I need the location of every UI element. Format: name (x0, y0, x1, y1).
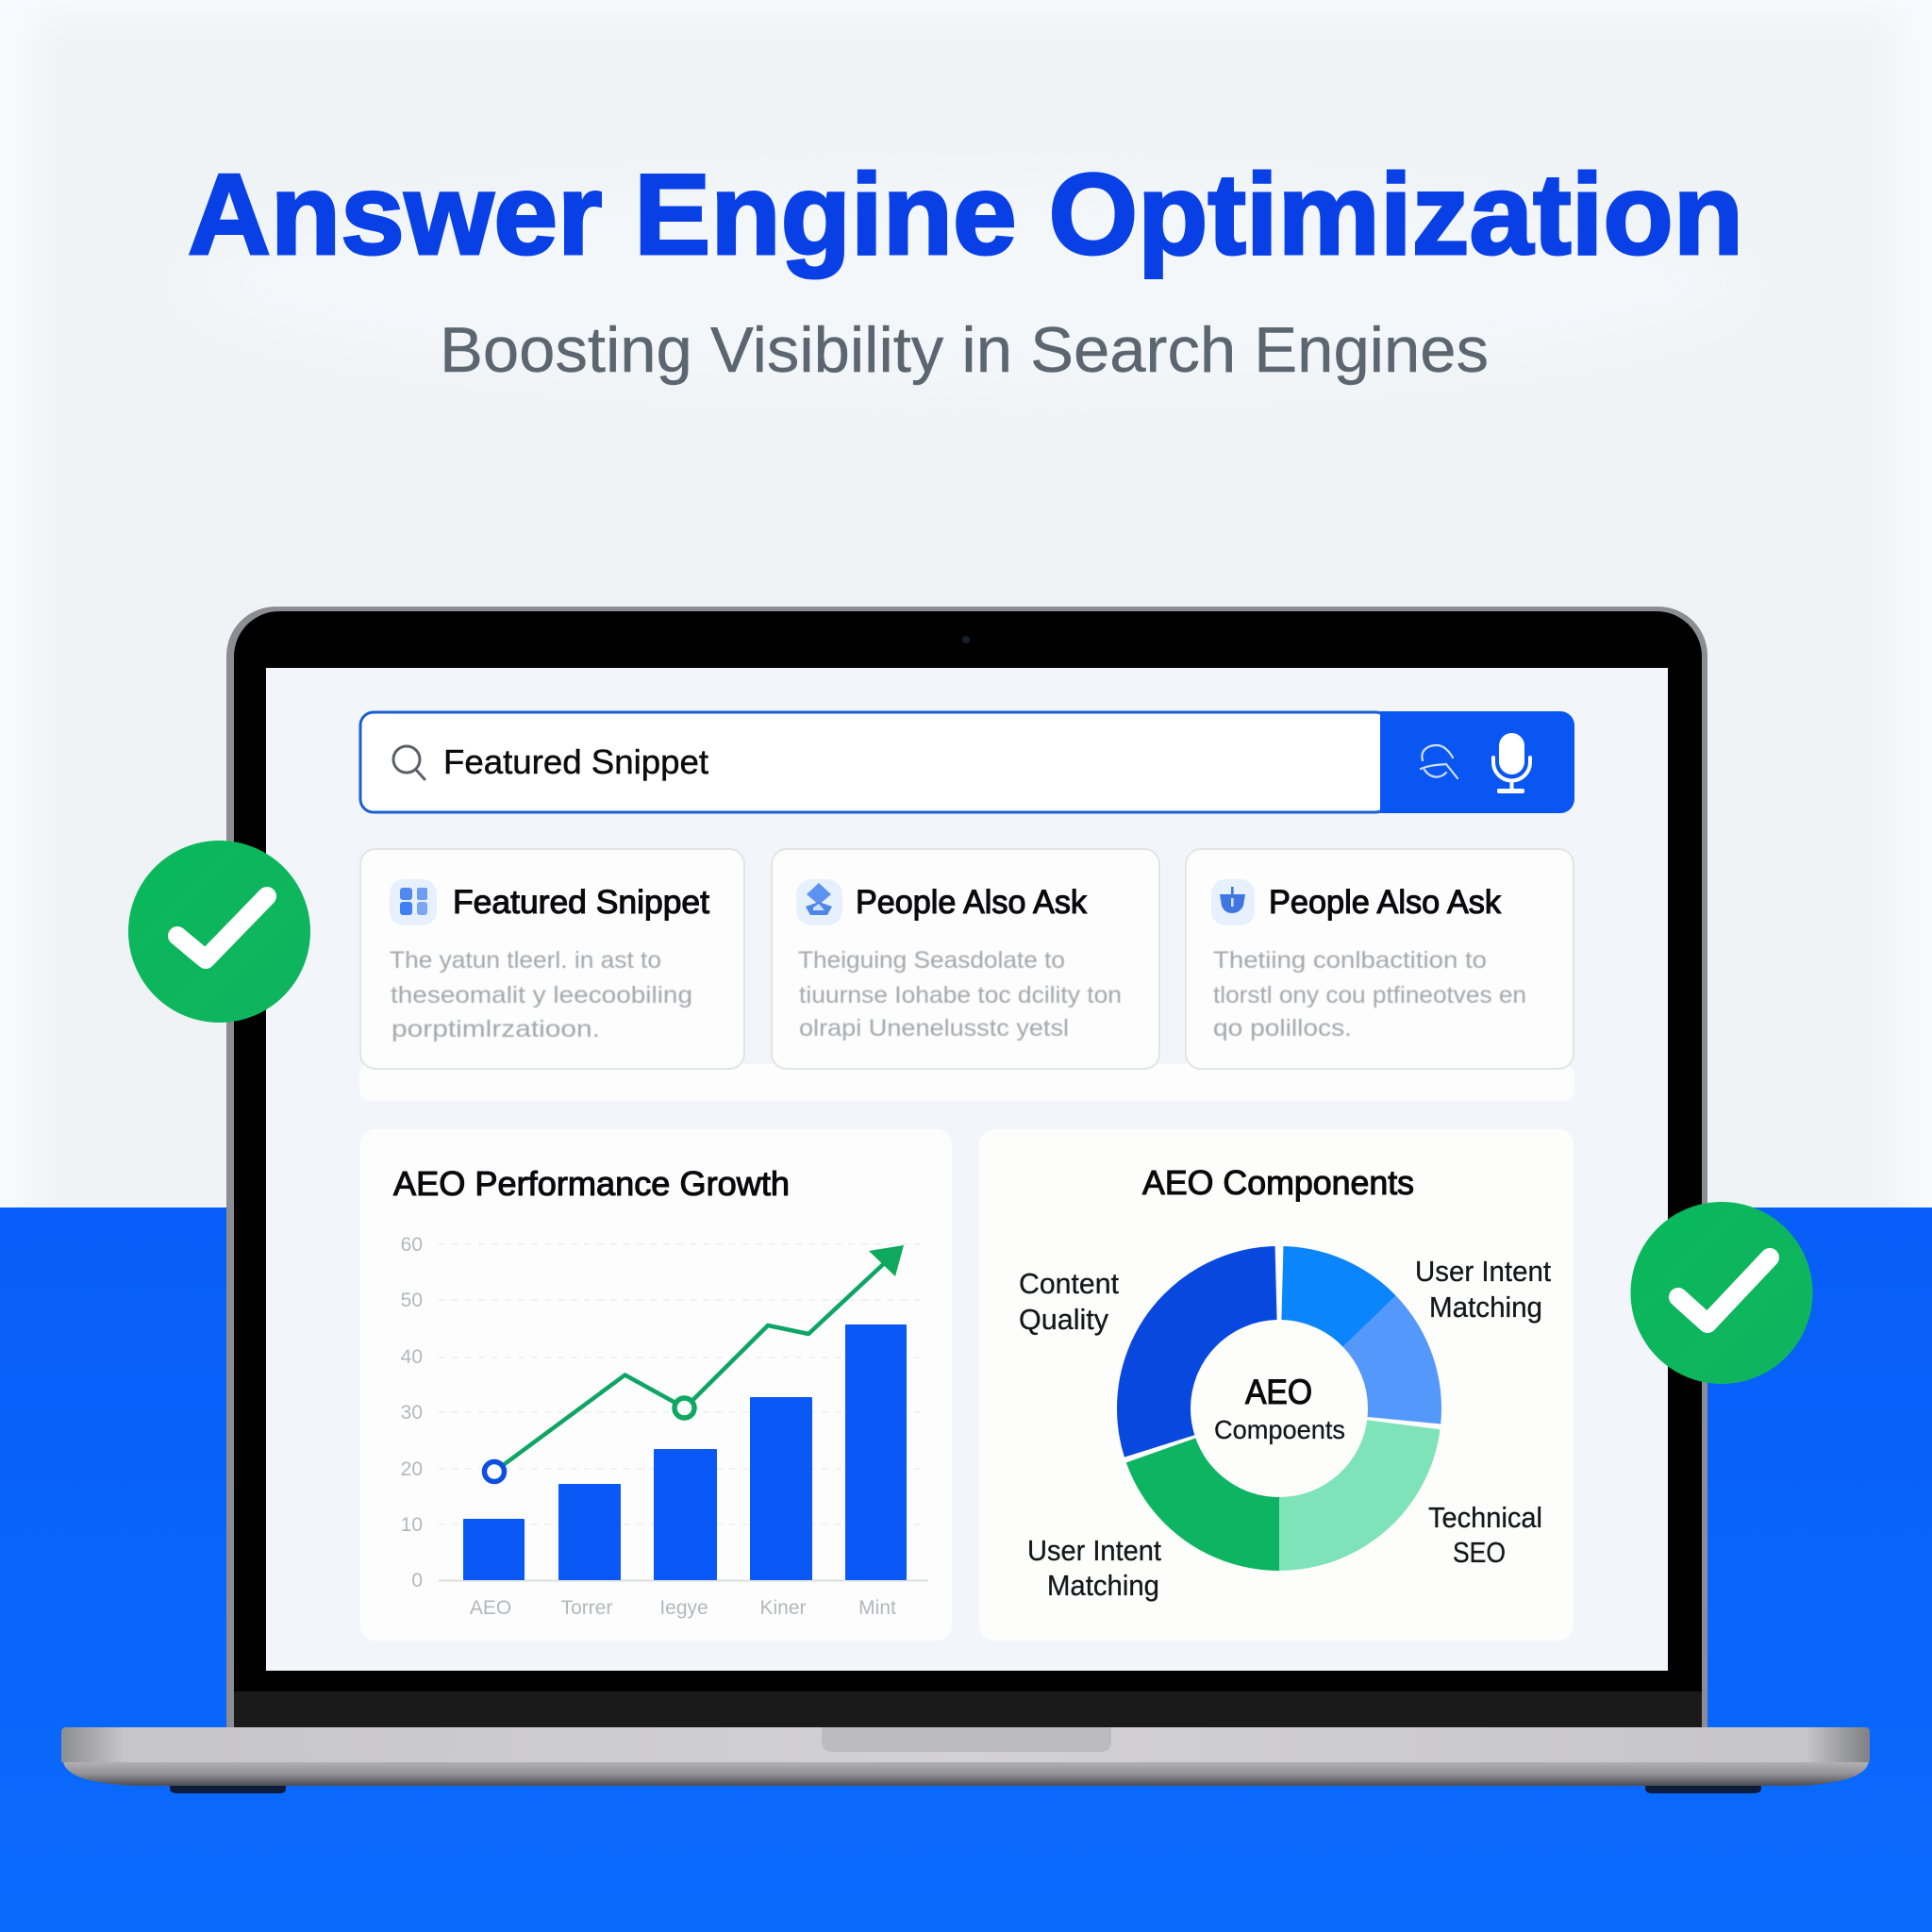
card body text: porptimlrzatioon. (391, 1016, 600, 1042)
x axis labels (470, 1597, 896, 1619)
camera (962, 636, 970, 643)
icon: stacked shapes (796, 879, 842, 925)
laptop screen (266, 668, 1668, 1671)
donut centre text: Compoents (1214, 1415, 1345, 1444)
panel: AEO components donut chart (979, 1129, 1574, 1641)
marker: start (485, 1462, 504, 1481)
y axis labels (401, 1234, 423, 1591)
y axis labels: 30 (401, 1402, 423, 1424)
label: technical seo (1428, 1501, 1542, 1569)
card body text: olrapi Unenelusstc yetsl (799, 1015, 1069, 1041)
icon: magnifier (393, 746, 425, 779)
card body text (1213, 947, 1526, 1041)
x axis labels: Mint (858, 1597, 896, 1619)
label: technical seo: Technical (1428, 1501, 1542, 1534)
card body text: Thetiing conlbactition to (1213, 947, 1487, 974)
card heading: People Also Ask (856, 884, 1087, 921)
icon: shield bowl (1211, 879, 1255, 925)
y axis labels: 60 (401, 1234, 423, 1256)
arrow head (869, 1245, 904, 1276)
y axis labels: 20 (401, 1458, 423, 1480)
y axis labels: 10 (401, 1514, 423, 1536)
cards backing strip (359, 1064, 1574, 1101)
label: technical seo: SEO (1453, 1536, 1506, 1569)
donut centre text: AEO (1245, 1373, 1312, 1411)
background: upper light area (0, 0, 1932, 1259)
card heading: People Also Ask (1269, 884, 1501, 921)
label: user intent matching bottom (1027, 1534, 1161, 1602)
card body text: Theiguing Seasdolate to (798, 947, 1065, 974)
x axis labels: AEO (470, 1597, 511, 1619)
card: People Also Ask 2 (1186, 849, 1574, 1069)
x axis labels: Torrer (561, 1597, 612, 1619)
label: user intent matching top: User Intent (1415, 1255, 1551, 1288)
laptop base (61, 1727, 1870, 1793)
card: Featured Snippet (360, 849, 744, 1069)
icon: left green check badge (128, 841, 310, 1023)
label: user intent matching bottom: Matching (1047, 1569, 1159, 1602)
x axis labels: Iegye (659, 1597, 708, 1619)
card body text: theseomalit y leecoobiling (391, 982, 692, 1008)
label: user intent matching top: Matching (1429, 1291, 1542, 1324)
chart heading: AEO Performance Growth (393, 1164, 790, 1203)
card body text: tlorstl ony cou ptfineotves en (1213, 982, 1526, 1008)
y axis labels: 40 (401, 1346, 423, 1368)
label: user intent matching top (1415, 1255, 1551, 1324)
card: People Also Ask 1 (772, 849, 1159, 1069)
panel: AEO performance growth chart (360, 1129, 952, 1641)
chart heading: AEO Components (1142, 1163, 1414, 1202)
icon: grid (390, 879, 437, 925)
label: user intent matching bottom: User Intent (1027, 1534, 1161, 1567)
donut centre text (1214, 1373, 1345, 1444)
search bar (360, 711, 1574, 813)
growth line (494, 1257, 891, 1472)
donut chart (1154, 1283, 1405, 1534)
y axis labels: 0 (411, 1570, 423, 1591)
title: Answer Engine Optimization (188, 150, 1743, 278)
marker: mid (675, 1398, 694, 1418)
card body text (798, 947, 1122, 1041)
laptop lid and bezel (226, 607, 1707, 1731)
search text: Featured Snippet (443, 742, 708, 781)
bars (463, 1324, 907, 1580)
card body text: The yatun tleerl. in ast to (390, 947, 661, 974)
label: content quality (1019, 1267, 1119, 1336)
background: lower blue band (0, 1208, 1932, 1932)
card heading: Featured Snippet (453, 884, 709, 921)
card body text (390, 947, 692, 1042)
card body text: qo polillocs. (1213, 1015, 1352, 1041)
card body text: tiuurnse Iohabe toc dcility ton (799, 982, 1122, 1008)
icon: right green check badge (1630, 1202, 1813, 1384)
label: content quality: Content (1019, 1267, 1119, 1300)
laptop (61, 607, 1870, 1793)
icon: microphone (1493, 733, 1530, 793)
y axis labels: 50 (401, 1290, 423, 1311)
label: content quality: Quality (1019, 1303, 1108, 1336)
subtitle: Boosting Visibility in Search Engines (440, 314, 1489, 386)
x axis labels: Kiner (759, 1597, 807, 1619)
icon: search glyph (1421, 745, 1457, 778)
